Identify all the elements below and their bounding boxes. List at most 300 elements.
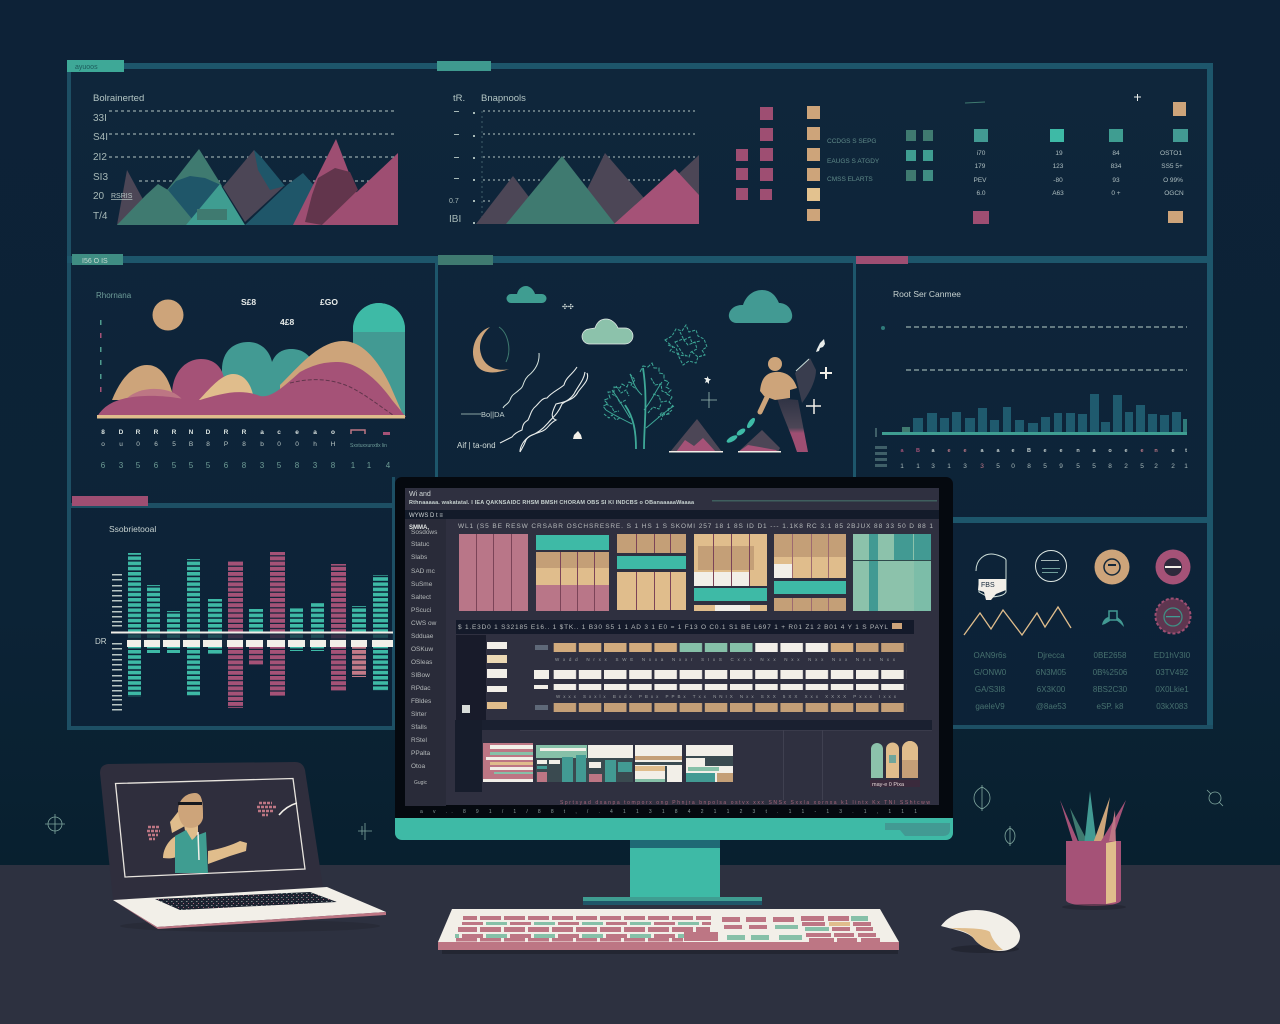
histogram x labels row 1: a bbox=[980, 448, 984, 454]
sun disc bbox=[152, 300, 184, 330]
screen title bar bbox=[409, 491, 937, 506]
category labels row 2: B bbox=[189, 441, 193, 448]
matrix numbers: 834 bbox=[1111, 163, 1122, 170]
screen footer text: Sprtsyad dxanpa tomporx ong Phnjra bnpolsa ostvx xxx SNSx Sxxla xornxa k1 lintx Kx TNI SShtcww bbox=[560, 800, 930, 806]
screen sidebar: RPdac bbox=[411, 685, 431, 692]
matrix numbers: A63 bbox=[1052, 190, 1064, 197]
screen toolbar band bbox=[405, 510, 939, 519]
matrix numbers: OSTO1 bbox=[1160, 150, 1182, 157]
plum squares bbox=[736, 107, 773, 200]
keyboard shadow bbox=[442, 949, 898, 954]
table row 4 cells bbox=[534, 684, 906, 690]
histogram dashed lines bbox=[906, 327, 1187, 370]
category labels row 1: o bbox=[331, 429, 335, 436]
table row 1 labels: Wxdd Nrxx SWE Nxxa Nxxr SIxS Cxxx Nxx Nxx Nxx Nxx Nxx Nxx bbox=[555, 657, 896, 662]
histogram x labels row 1: a bbox=[1092, 448, 1096, 454]
screen sidebar: OSKuw bbox=[411, 646, 433, 653]
squiggle line 1 with label: Bo||DA bbox=[481, 410, 504, 419]
keyboard body bbox=[438, 909, 899, 942]
stand shadow band bbox=[630, 840, 720, 848]
panel: icons and zigzag bbox=[964, 550, 1191, 711]
chart 1 y axis labels: 20 bbox=[93, 191, 105, 202]
cup shadow bbox=[1062, 904, 1126, 910]
computer mouse bbox=[941, 910, 1020, 953]
histogram x labels row 1: a bbox=[931, 448, 935, 454]
panel: diverging bar chart bbox=[95, 524, 393, 710]
histogram x labels row 1: e bbox=[1140, 448, 1144, 454]
histogram baseline bbox=[882, 432, 1187, 435]
chart 2 mountains bbox=[476, 153, 699, 224]
category labels row 1: R bbox=[242, 429, 247, 436]
dashboard frame: outer panel with dividers bbox=[67, 63, 1213, 730]
category labels row 3: 5 bbox=[277, 461, 282, 470]
screen sidebar: SuSme bbox=[411, 581, 433, 588]
mini chart 3 bbox=[635, 745, 682, 782]
treemap 1: rose columns bbox=[459, 534, 528, 611]
mountain left bbox=[669, 419, 723, 452]
header tabs: I56 O IS bbox=[82, 258, 108, 265]
number pad keys bbox=[801, 916, 880, 942]
mouse body bbox=[941, 910, 1020, 951]
table row labels bbox=[487, 642, 507, 709]
matrix numbers: O 99% bbox=[1163, 177, 1183, 184]
squiggle line 2 with label bbox=[457, 367, 577, 450]
icon legend text grid: G/ONW0 bbox=[974, 668, 1007, 677]
icon: plum disc bbox=[1156, 550, 1190, 584]
matrix row labels bbox=[827, 138, 880, 183]
icon legend text grid bbox=[974, 651, 1191, 711]
histogram x labels row 2: 8 bbox=[1027, 463, 1031, 470]
matrix numbers: OGCN bbox=[1164, 190, 1184, 197]
chart 1 grid lines bbox=[109, 111, 396, 181]
category labels row 1: R bbox=[224, 429, 229, 436]
screen toolbar band: WYWS D t ≡ bbox=[409, 513, 443, 519]
category labels row 1: a bbox=[260, 429, 264, 436]
screen sidebar: SMMA, bbox=[409, 525, 429, 531]
category labels row 1 bbox=[101, 429, 335, 436]
squiggle line 1 with label bbox=[461, 353, 539, 419]
icon: head outline: FBS bbox=[981, 582, 995, 589]
histogram x labels row 1: e bbox=[947, 448, 951, 454]
panel: bar histogram bbox=[875, 289, 1188, 470]
laptop screen lid bbox=[100, 762, 323, 900]
heading: diverging chart title: Ssobrietooal bbox=[109, 524, 156, 534]
category labels row 3: 5 bbox=[206, 461, 211, 470]
panel: colour square matrix bbox=[736, 94, 1188, 224]
histogram x labels row 1: e bbox=[1171, 448, 1175, 454]
panel: illustrated landscape bbox=[457, 286, 832, 452]
panel: mountain area chart 2: Bnapnools bbox=[481, 93, 526, 104]
category labels row 2: P bbox=[224, 441, 228, 448]
chart 1 y axis labels: 2I2 bbox=[93, 152, 107, 163]
histogram x labels row 1: e bbox=[963, 448, 967, 454]
pencils bbox=[1060, 791, 1126, 846]
screen sidebar: PPalta bbox=[411, 750, 431, 757]
histogram marker dot bbox=[881, 326, 885, 330]
category labels row 3: 6 bbox=[154, 461, 159, 470]
monitor bbox=[395, 477, 953, 905]
icon: head outline bbox=[976, 554, 1006, 600]
hills bbox=[97, 303, 406, 418]
histogram x labels row 2 bbox=[900, 463, 1188, 470]
histogram x labels row 1: n bbox=[1076, 448, 1080, 454]
table left column bbox=[456, 635, 486, 720]
category labels row 3: 4 bbox=[386, 461, 391, 470]
chart 1 inline label: RSRIS bbox=[111, 193, 133, 200]
mouse shadow bbox=[951, 945, 1019, 953]
matrix numbers: 93 bbox=[1112, 177, 1120, 184]
category labels row 2: 8 bbox=[206, 441, 210, 448]
icon legend text grid: 03TV492 bbox=[1156, 668, 1189, 677]
diverging chart centre bands bbox=[111, 632, 393, 647]
category labels row 3: 5 bbox=[172, 461, 177, 470]
histogram x labels row 2: 5 bbox=[1043, 463, 1047, 470]
screen sidebar: CWS ow bbox=[411, 620, 437, 627]
matrix numbers: SS5 5+ bbox=[1161, 163, 1183, 170]
category labels row 1: e bbox=[295, 429, 299, 436]
laptop base rim bbox=[113, 900, 386, 929]
histogram left axis marks bbox=[875, 428, 887, 467]
category labels row 2: 5 bbox=[172, 441, 176, 448]
histogram x labels row 1: a bbox=[996, 448, 1000, 454]
category labels row 2: o bbox=[101, 441, 105, 448]
footer squares bbox=[973, 102, 1186, 224]
vertical tick marks bbox=[100, 320, 102, 392]
small star glyph top: ✣✣ bbox=[562, 303, 574, 311]
matrix numbers: 0 + bbox=[1111, 190, 1121, 197]
category labels row 1: D bbox=[119, 429, 124, 436]
category labels row 2: 0 bbox=[295, 441, 299, 448]
treemap 5: tan cream teal bbox=[774, 534, 846, 611]
short line mark bbox=[965, 102, 985, 103]
histogram x labels row 2: 3 bbox=[980, 463, 984, 470]
category labels row 2: u bbox=[119, 441, 123, 448]
chart 1 mountains bbox=[117, 139, 398, 225]
category labels row 2: 0 bbox=[136, 441, 140, 448]
category labels row 1: R bbox=[136, 429, 141, 436]
monitor chin bbox=[395, 818, 953, 840]
chart 2 grid lines bbox=[482, 111, 698, 225]
category labels row 3: 5 bbox=[189, 461, 194, 470]
histogram x labels row 2: 0 bbox=[1011, 463, 1015, 470]
cup highlight bbox=[1106, 841, 1116, 904]
pencil cup bbox=[1060, 791, 1126, 910]
category labels row 2: h bbox=[313, 441, 317, 448]
icon legend text grid: 03kX083 bbox=[1156, 702, 1188, 711]
screen title bar: Wi and bbox=[409, 491, 431, 498]
bezel tick text: a v .. 8 9 1 / 1 / 8 8 t , / . 4 1 1 3 1 8 4 2 1 1 2 3 t . 1 1 - 1 3 . 1 , 1 1 1 bbox=[420, 809, 920, 815]
matrix numbers: i70 bbox=[977, 150, 986, 157]
screen sidebar: Slabs bbox=[411, 554, 428, 561]
cup body bbox=[1066, 841, 1121, 906]
histogram x labels row 1: e bbox=[1059, 448, 1063, 454]
category labels row 3: 1 bbox=[351, 461, 356, 470]
small wall doodles bbox=[45, 785, 1223, 846]
screen column header text: WL1 (S5 BE RESW CRSABR OSCHSRESRE. S 1 HS 1 S SKOMI 257 18 1 8S ID D1 --- 1.1K8 RC 3.1 85 2BJUX 88 33 50 D 88 1 bbox=[458, 523, 933, 530]
axis label DR: DR bbox=[95, 637, 107, 646]
chart 1 y axis labels: T/4 bbox=[93, 211, 108, 222]
monitor bezel bbox=[395, 477, 953, 818]
screen sidebar: Otoa bbox=[411, 763, 425, 770]
crescent moon bbox=[473, 327, 509, 372]
category labels row 2: 0 bbox=[277, 441, 281, 448]
icon legend text grid: gaeleV9 bbox=[975, 702, 1005, 711]
category labels row 1: D bbox=[206, 429, 211, 436]
heading: histogram title: Root Ser Canmee bbox=[893, 289, 961, 299]
screen sidebar: Sfalls bbox=[411, 724, 428, 731]
header tabs: ayuoos bbox=[75, 64, 98, 71]
screen sidebar: Sosdows bbox=[411, 529, 438, 536]
heading: hills chart title: Rhornana bbox=[96, 291, 132, 300]
screen sidebar: RStel bbox=[411, 737, 427, 744]
screen sidebar: SAD mc bbox=[411, 568, 436, 575]
table header band: $ 1.E3D0 1 S32185 E16.. 1 $TK.. 1 B30 S5 1 1 AD 3 1 E0 = 1 F13 O C0.1 S1 BE L697 1 + R01 Z1 2 B01 4 Y 1 S PAYL bbox=[458, 624, 888, 631]
mini chart 1 bbox=[483, 743, 533, 782]
keyboard front rim bbox=[438, 942, 899, 950]
histogram x labels row 2: 5 bbox=[1140, 463, 1144, 470]
matrix numbers: PEV bbox=[973, 177, 987, 184]
screen sidebar: OSleas bbox=[411, 659, 433, 666]
icon legend text grid: ED1hV3I0 bbox=[1154, 651, 1191, 660]
treemap 2: teal header stacked bbox=[536, 535, 609, 611]
tan squares bbox=[807, 106, 820, 221]
histogram x labels row 2: 3 bbox=[963, 463, 967, 470]
category labels row 3: 6 bbox=[224, 461, 229, 470]
histogram x labels row 2: 5 bbox=[1076, 463, 1080, 470]
table header band bbox=[456, 620, 914, 634]
chart 2 axis ticks: IBI bbox=[449, 214, 461, 225]
category labels row 1: a bbox=[313, 429, 317, 436]
icon legend text grid: 6X3K00 bbox=[1037, 685, 1066, 694]
floating leaf cluster bbox=[665, 325, 707, 365]
category labels row 3: 8 bbox=[295, 461, 300, 470]
histogram x labels row 2: 5 bbox=[996, 463, 1000, 470]
histogram x labels row 1: B bbox=[1027, 448, 1031, 454]
histogram x labels row 2: 1 bbox=[1184, 463, 1188, 470]
heading: chart 2 title: tR. bbox=[453, 93, 465, 104]
screen sidebar bbox=[405, 519, 446, 806]
screen sidebar: Gugic bbox=[414, 780, 428, 786]
screen sidebar: SIBow bbox=[411, 672, 430, 679]
category labels row 3: 6 bbox=[101, 461, 106, 470]
icon: outlined circle bbox=[1036, 550, 1066, 582]
presenter swoosh bbox=[279, 803, 297, 815]
screen background bbox=[405, 488, 939, 805]
category labels row 1: 8 bbox=[101, 429, 105, 436]
category labels row 2: 6 bbox=[154, 441, 158, 448]
histogram x labels row 1: a bbox=[900, 448, 904, 454]
matrix row labels: CMSS ELARTS bbox=[827, 176, 873, 183]
icon legend text grid: 0B%2506 bbox=[1093, 668, 1128, 677]
matrix numbers: 19 bbox=[1055, 150, 1063, 157]
category labels row 3 bbox=[101, 461, 391, 470]
icon legend text grid: 8BS2C30 bbox=[1093, 685, 1128, 694]
moon thin arc bbox=[499, 327, 509, 362]
matrix numbers: 123 bbox=[1053, 163, 1064, 170]
presenter figure bbox=[163, 793, 247, 873]
teal pods bbox=[726, 417, 756, 444]
plus mark bbox=[1134, 94, 1141, 101]
laptop base bbox=[113, 887, 386, 927]
category labels row 1: R bbox=[154, 429, 159, 436]
histogram x labels row 2: 5 bbox=[1092, 463, 1096, 470]
category labels row 3: 1 bbox=[367, 461, 372, 470]
category labels row 3: 3 bbox=[260, 461, 265, 470]
histogram x labels row 1: t bbox=[1185, 448, 1187, 454]
chart 1 y axis labels: 33I bbox=[93, 113, 107, 124]
histogram x labels row 2: 2 bbox=[1154, 463, 1158, 470]
squiggle double line bbox=[520, 372, 588, 452]
presenter speech scribble right bbox=[257, 803, 277, 815]
mini chart 2 bbox=[536, 745, 633, 782]
histogram x labels row 2: 3 bbox=[931, 463, 935, 470]
chin shading bbox=[885, 823, 950, 836]
teal header squares bbox=[974, 129, 1188, 142]
category labels row 2: b bbox=[260, 441, 264, 448]
histogram x labels row 2: 9 bbox=[1059, 463, 1063, 470]
treemap 3: tan teal tan bbox=[617, 534, 686, 610]
category labels row 1: R bbox=[172, 429, 177, 436]
histogram x labels row 2: 2 bbox=[1124, 463, 1128, 470]
hills legend bbox=[350, 430, 390, 449]
panel: mountain area chart 1 bbox=[93, 93, 398, 225]
hill values: £GO bbox=[320, 297, 338, 307]
header tabs bbox=[67, 60, 908, 506]
category labels row 3: 3 bbox=[119, 461, 124, 470]
category labels row 3: 8 bbox=[331, 461, 336, 470]
laptop bbox=[100, 762, 386, 932]
histogram bars bbox=[902, 394, 1187, 433]
histogram x labels row 2: 1 bbox=[916, 463, 920, 470]
screen sidebar: Statuc bbox=[411, 541, 430, 548]
laptop inner frame bbox=[116, 778, 305, 877]
panel: mountain area chart 2 bbox=[449, 93, 699, 225]
tree bbox=[603, 363, 674, 449]
category labels row 2 bbox=[101, 441, 336, 448]
chart 2 axis ticks: 0.7 bbox=[449, 198, 459, 205]
icon legend text grid: 6N3M05 bbox=[1036, 668, 1067, 677]
matrix numbers: -80 bbox=[1053, 177, 1063, 184]
table row 4 labels: Wxxx Sxxlx Bxdx PBxx PPBx Txx NNIX Nxx SXX 5XX Xxx XXXX Pxxx Ixxx bbox=[556, 694, 897, 699]
small teal squares bbox=[906, 130, 933, 181]
hill values: 4£8 bbox=[280, 317, 294, 327]
histogram x labels row 1 bbox=[900, 448, 1187, 454]
monitor stand neck bbox=[630, 840, 720, 897]
diverging chart bars bbox=[128, 552, 388, 708]
laptop shadow bbox=[120, 920, 380, 932]
desk surface bbox=[0, 865, 1280, 1024]
treemap 4: tan cream teal bbox=[694, 534, 767, 611]
data table bbox=[456, 635, 906, 720]
keyboard bbox=[438, 909, 899, 954]
hill values bbox=[241, 297, 338, 327]
icon legend text grid: eSP. k8 bbox=[1097, 702, 1124, 711]
matrix numbers: 84 bbox=[1112, 150, 1120, 157]
histogram x labels row 2: 1 bbox=[947, 463, 951, 470]
histogram x labels row 2: 1 bbox=[900, 463, 904, 470]
histogram x labels row 1: B bbox=[916, 448, 920, 454]
cloud large teal bbox=[729, 290, 792, 323]
histogram x labels row 1: e bbox=[1011, 448, 1015, 454]
icon: tan disc bbox=[1094, 550, 1130, 584]
category labels row 3: 5 bbox=[136, 461, 141, 470]
heading: chart 1 title: Bolrainerted bbox=[93, 93, 144, 104]
matrix row labels: EAUGS S ATGDY bbox=[827, 158, 880, 165]
icon legend text grid: Djrecca bbox=[1037, 651, 1065, 660]
hill values: S£8 bbox=[241, 297, 256, 307]
histogram x labels row 1: o bbox=[1108, 448, 1112, 454]
histogram x labels row 2: 8 bbox=[1108, 463, 1112, 470]
chart 1 y axis labels bbox=[93, 113, 108, 222]
key rows bbox=[453, 916, 718, 942]
cloud mint bbox=[582, 319, 633, 344]
table row 5 cells bbox=[535, 703, 906, 712]
lower dark panel bbox=[455, 720, 932, 800]
screen sidebar: Saltect bbox=[411, 594, 431, 601]
category labels row 3: 8 bbox=[242, 461, 247, 470]
chart 1 y axis labels: S4I bbox=[93, 132, 108, 143]
category labels row 3: 3 bbox=[313, 461, 318, 470]
screen title bar: Rthnaaaaa. wakatatal. I IEA QAKNSAIDC RHSM BMSH CHORAM OBS SI KI INDCBS o OBanaaaaaWaaaa bbox=[409, 500, 695, 506]
navigation keys bbox=[722, 917, 802, 940]
category labels row 2: H bbox=[331, 441, 336, 448]
histogram x labels row 1: e bbox=[1124, 448, 1128, 454]
matrix numbers: 6.0 bbox=[976, 190, 986, 197]
icon legend text grid: 0X0Lkie1 bbox=[1155, 685, 1189, 694]
category labels row 2: 8 bbox=[242, 441, 246, 448]
panel: layered hills chart bbox=[96, 291, 406, 470]
zigzag line bbox=[964, 607, 1071, 635]
icon: teal device bbox=[1102, 611, 1124, 627]
screen sidebar: Slrter bbox=[411, 711, 427, 718]
treemap 6: mint columns bbox=[853, 534, 931, 611]
histogram x labels row 1: e bbox=[1043, 448, 1047, 454]
histogram x labels row 1: n bbox=[1154, 448, 1158, 454]
screen sidebar: PScuci bbox=[411, 607, 431, 614]
chart 1 y axis labels: SI3 bbox=[93, 172, 108, 183]
icon legend text grid: @8ae53 bbox=[1036, 702, 1067, 711]
cloud small teal bbox=[506, 286, 546, 303]
table row 1 cells bbox=[535, 643, 906, 652]
hills legend: Sxxtuxxunxtlx lin bbox=[350, 443, 387, 449]
mountain right bbox=[738, 430, 781, 452]
icon: dark plum dial bbox=[1156, 598, 1190, 634]
screen sidebar: Sdduae bbox=[411, 633, 434, 640]
table icon bbox=[462, 705, 470, 713]
small bell bbox=[573, 431, 582, 439]
icon legend text grid: OAN9r6s bbox=[974, 651, 1006, 660]
category labels row 1: N bbox=[189, 429, 194, 436]
icon legend text grid: 0BE2658 bbox=[1094, 651, 1127, 660]
table row 3 cells bbox=[534, 670, 906, 679]
screen sidebar: FBldes bbox=[411, 698, 432, 705]
matrix numbers bbox=[973, 150, 1184, 197]
person with tablet bbox=[760, 357, 816, 452]
presenter speech scribble left bbox=[147, 827, 160, 839]
mini column chart: may-e 0 Pixa bbox=[872, 782, 905, 788]
matrix numbers: 179 bbox=[975, 163, 986, 170]
mouse thumb area bbox=[950, 928, 1003, 950]
diverging chart left scale bbox=[112, 574, 122, 710]
chart 2 axis ticks bbox=[449, 111, 475, 225]
sparkles bbox=[701, 339, 832, 414]
histogram x labels row 2: 2 bbox=[1171, 463, 1175, 470]
stand base bbox=[583, 897, 762, 905]
icon legend text grid: GA/S3I8 bbox=[975, 685, 1006, 694]
mini chart 4 bbox=[686, 745, 733, 782]
category labels row 1: c bbox=[277, 429, 281, 436]
squiggle line 2 with label: Aif | ta-ond bbox=[457, 441, 496, 450]
